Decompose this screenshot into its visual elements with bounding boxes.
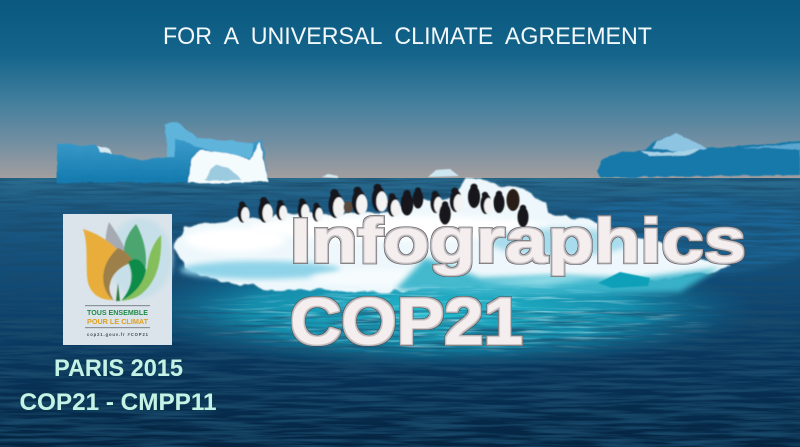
headline: COP21: COP21 xyxy=(290,284,523,358)
logo: slogan line 1: TOUS ENSEMBLE xyxy=(87,310,148,317)
title: FOR A UNIVERSAL CLIMATE AGREEMENT xyxy=(163,23,652,50)
background: sea xyxy=(0,178,800,447)
headline: Infographics: Infographics xyxy=(290,207,746,276)
logo panel xyxy=(63,214,172,345)
caption: COP21 - CMPP11: COP21 - CMPP11 xyxy=(20,389,216,416)
logo: leaves xyxy=(83,222,161,301)
penguins xyxy=(238,184,528,227)
caption: Paris 2015: PARIS 2015 xyxy=(54,355,183,382)
sea highlights under floe xyxy=(184,283,716,356)
ice floe xyxy=(175,177,735,296)
iceberg: right xyxy=(597,134,800,177)
iceberg: far small xyxy=(322,169,459,178)
iceberg: left xyxy=(57,122,268,183)
logo: url: cop21.gouv.fr #COP21 xyxy=(87,332,149,337)
background: sky xyxy=(0,0,800,180)
logo: slogan line 2: POUR LE CLIMAT xyxy=(87,319,149,326)
